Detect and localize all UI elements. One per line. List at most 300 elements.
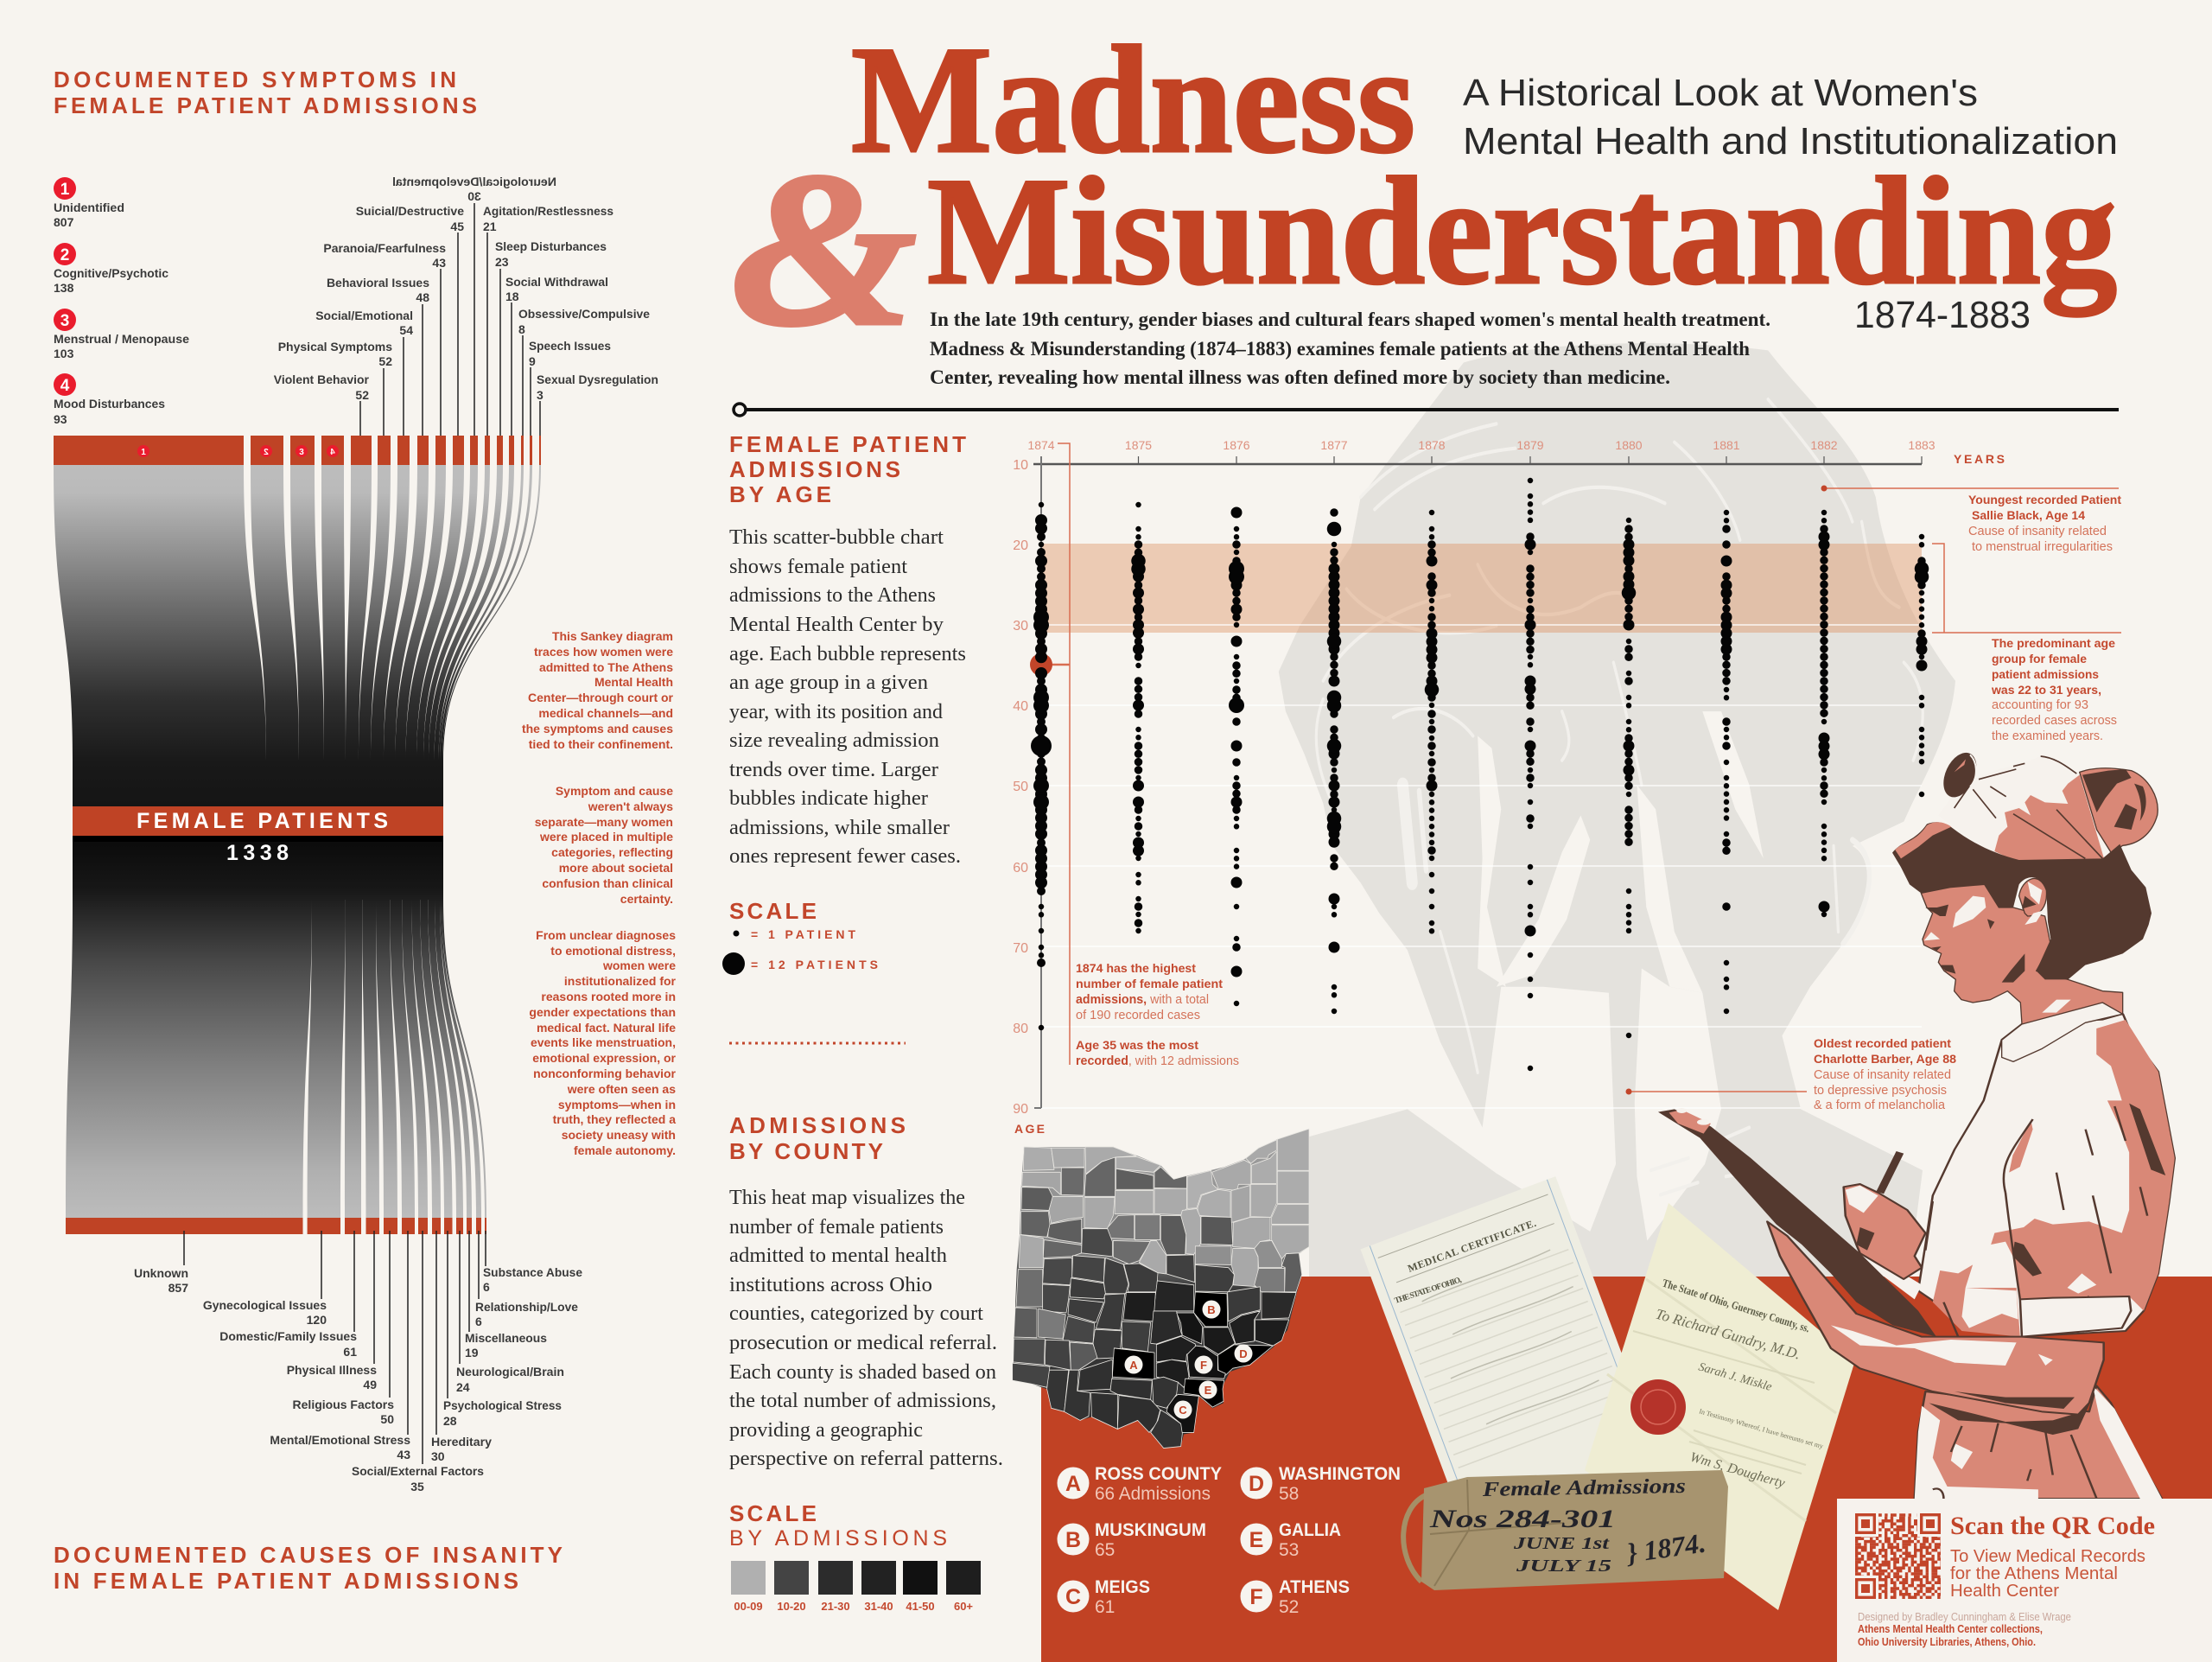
scale legend: patients — [722, 898, 878, 975]
symptom labels with leader lines: Obsessive/Compulsive — [518, 307, 650, 321]
nurse clipboard — [1658, 1109, 1936, 1337]
sankey explanatory notes: reasons rooted more in — [541, 990, 676, 1003]
cause labels with leader lines: 6 — [483, 1280, 490, 1294]
sankey explanatory notes: gender expectations than — [529, 1005, 676, 1019]
symptom labels with leader lines: Neurological/Developmental — [392, 175, 556, 188]
map county markers — [1125, 1300, 1253, 1419]
document: medical certificate — [1360, 1176, 1658, 1525]
county legend: C — [1065, 1585, 1081, 1609]
chart axes and year labels: 30 — [1013, 619, 1028, 634]
county legend: MEIGS — [1095, 1577, 1150, 1597]
subtitle — [1463, 72, 2118, 162]
county legend: 53 — [1279, 1540, 1299, 1560]
heading: documented causes: IN FEMALE PATIENT ADMISSIONS — [54, 1568, 518, 1594]
county legend: GALLIA — [1279, 1520, 1341, 1540]
scale legend: admissions: 31-40 — [864, 1600, 893, 1613]
heading: admissions by county — [729, 1112, 906, 1164]
cause labels with leader lines: 50 — [380, 1412, 394, 1426]
heading: documented causes — [54, 1542, 563, 1594]
callout: predominant age group: group for female — [1992, 652, 2087, 665]
map county markers: E — [1205, 1384, 1212, 1397]
text: chart description: shows female patient — [729, 556, 907, 578]
scatter-bubble chart: age by year — [1013, 438, 2121, 1136]
cause labels with leader lines: Physical Illness — [287, 1363, 377, 1377]
heading: admissions by age: FEMALE PATIENT — [729, 431, 966, 457]
sankey explanatory notes: were placed in multiple — [539, 830, 673, 844]
scale legend: patients: SCALE — [729, 898, 817, 924]
heading: admissions by age — [729, 431, 966, 507]
callout: youngest patient: to menstrual irregularities — [1972, 540, 2113, 554]
symptom labels with leader lines: 48 — [416, 290, 429, 304]
intro paragraph: Center, revealing how mental illness was often defined more by society than medicine. — [930, 366, 1670, 388]
chart axes and year labels: 1878 — [1418, 438, 1446, 452]
county legend: 52 — [1279, 1597, 1299, 1617]
symptom legend: 93 — [54, 412, 67, 426]
sankey explanatory notes: institutionalized for — [564, 974, 677, 988]
paper under writing hand — [1853, 1247, 1922, 1299]
county legend: B — [1065, 1528, 1081, 1552]
chart axes and year labels: 40 — [1013, 699, 1028, 714]
symptom labels with leader lines: 8 — [518, 322, 525, 336]
cause labels with leader lines: 49 — [363, 1378, 377, 1391]
chart axes and year labels: 80 — [1013, 1022, 1028, 1036]
symptom labels with leader lines: Speech Issues — [529, 339, 611, 353]
county legend: WASHINGTON — [1279, 1464, 1401, 1484]
cause labels with leader lines: Domestic/Family Issues — [219, 1329, 357, 1343]
heading: documented causes: DOCUMENTED CAUSES OF INSANITY — [54, 1542, 563, 1568]
text: map description: perspective on referral patterns. — [729, 1448, 1003, 1470]
sankey explanatory notes: admitted to The Athens — [539, 660, 673, 674]
cause labels with leader lines: Relationship/Love — [475, 1300, 578, 1314]
sankey explanatory notes: separate—many women — [535, 815, 673, 829]
callout: 1874 highest: admissions, with a total — [1076, 993, 1209, 1007]
sankey explanatory notes: confusion than clinical — [542, 876, 673, 890]
bubbles 1881 — [1724, 513, 1729, 1012]
symptom labels with leader lines: 52 — [355, 388, 369, 402]
sankey explanatory notes: Center—through court or — [528, 691, 674, 704]
QR panel: Health Center — [1950, 1582, 2059, 1601]
document: state of Ohio probate letter: To Richard Gundry, M.D. — [1654, 1306, 1802, 1363]
sankey explanatory notes: symptoms—when in — [558, 1098, 676, 1111]
title: Misunderstanding: Misunderstanding — [927, 145, 2117, 316]
chart axes and year labels: 70 — [1013, 941, 1028, 956]
QR panel: To View Medical Records — [1950, 1547, 2145, 1566]
bubbles 1877 — [1332, 513, 1337, 1012]
cause labels with leader lines: 35 — [410, 1480, 424, 1493]
callout: youngest patient: Cause of insanity related — [1968, 525, 2107, 538]
symptom legend: 3 — [60, 312, 69, 330]
clipboard fingers — [1669, 1108, 1711, 1134]
symptom labels with leader lines: 3 — [537, 388, 543, 402]
callout: 1874 highest: recorded, with 12 admissions — [1076, 1054, 1239, 1068]
sankey: bar badges: 1 — [141, 448, 146, 457]
map county markers: B — [1207, 1303, 1216, 1316]
chart axes and year labels: 20 — [1013, 538, 1028, 553]
sankey: cause flows — [66, 835, 486, 1218]
QR call to action: Scan the QR Code — [1950, 1512, 2155, 1540]
text: chart description: Mental Health Center by — [729, 614, 944, 636]
sankey: bar badges: 4 — [330, 448, 335, 457]
text: chart description: This scatter-bubble chart — [729, 526, 944, 549]
symptom labels with leader lines: Paranoia/Fearfulness — [323, 241, 446, 255]
sankey diagram — [54, 436, 541, 1234]
sankey explanatory notes: tied to their confinement. — [529, 737, 673, 751]
heading: admissions by county: BY COUNTY — [729, 1138, 883, 1164]
symptom labels with leader lines: Physical Symptoms — [278, 340, 392, 353]
text: chart description: admissions, while smaller — [729, 817, 950, 839]
symptom legend: 138 — [54, 281, 74, 295]
scale legend: admissions: 10-20 — [777, 1600, 806, 1613]
symptom legend: 4 — [60, 377, 70, 395]
QR code — [1854, 1512, 1942, 1600]
archival envelope: Nos 284-301 — [1429, 1505, 1616, 1533]
scale legend: admissions: BY ADMISSIONS — [729, 1526, 947, 1551]
text: chart description: admissions to the Athens — [729, 584, 936, 607]
age band 22 to 31 — [1041, 544, 1922, 633]
sankey: symptom flows — [54, 465, 541, 807]
cause labels with leader lines: Religious Factors — [293, 1398, 394, 1411]
callout lines — [1041, 443, 2121, 1092]
sankey explanatory notes: were often seen as — [567, 1082, 676, 1096]
symptom labels with leader lines: Social Withdrawal — [505, 275, 608, 289]
document: state of Ohio probate letter: In Testimony Whereof, I have hereunto set my — [1698, 1407, 1824, 1450]
document: medical certificate: THE STATE OF OHIO, — [1394, 1276, 1464, 1306]
symptom legend: Cognitive/Psychotic — [54, 266, 168, 280]
sankey explanatory notes: medical channels—and — [538, 706, 673, 720]
chart axes and year labels: 1875 — [1125, 438, 1152, 452]
symptom labels with leader lines: 9 — [529, 354, 536, 368]
sankey explanatory notes: more about societal — [559, 861, 673, 875]
callout: predominant age group: was 22 to 31 years, — [1991, 683, 2101, 697]
chart axes and year labels: 1874 — [1027, 438, 1055, 452]
symptom legend: Mood Disturbances — [54, 397, 165, 411]
sankey: top red bars — [54, 436, 541, 465]
callout: predominant age group: recorded cases across — [1992, 714, 2117, 728]
cause labels with leader lines: 43 — [397, 1448, 410, 1461]
symptom labels with leader lines: 23 — [495, 255, 509, 269]
sankey explanatory notes: female autonomy. — [574, 1143, 676, 1157]
timeline rule — [734, 404, 2119, 416]
map county markers: A — [1129, 1359, 1138, 1372]
sankey explanatory notes: the symptoms and causes — [522, 722, 673, 735]
chart axes and year labels: 50 — [1013, 780, 1028, 794]
credits: Athens Mental Health Center collections, — [1858, 1622, 2043, 1635]
symptom labels with leader lines — [274, 175, 658, 436]
background silhouette: woman's head — [1279, 343, 1955, 1279]
heading: admissions by age: ADMISSIONS — [729, 456, 900, 482]
county legend: 66 Admissions — [1095, 1484, 1211, 1504]
nurse forearm — [1767, 1221, 2104, 1415]
subtitle: Mental Health and Institutionalization — [1463, 120, 2118, 162]
cause labels with leader lines: 30 — [431, 1449, 445, 1463]
bubbles 1874 — [1039, 505, 1044, 1028]
symptom labels with leader lines: Sexual Dysregulation — [537, 373, 658, 386]
QR panel — [1837, 1499, 2212, 1662]
document: state of Ohio probate letter: Wm S. Dougherty — [1688, 1450, 1787, 1491]
cause labels with leader lines: Unknown — [134, 1266, 188, 1280]
bubbles 1879 — [1528, 481, 1533, 1069]
nurse skirt — [1915, 1385, 2162, 1499]
symptom legend: 807 — [54, 215, 74, 229]
cause labels with leader lines: Gynecological Issues — [203, 1298, 327, 1312]
sankey explanatory notes: to emotional distress, — [550, 944, 676, 958]
sankey explanatory notes: This Sankey diagram — [552, 629, 673, 643]
symptom labels with leader lines: 45 — [450, 220, 464, 233]
red ground panel — [1041, 1277, 2212, 1662]
symptom legend — [54, 177, 189, 426]
sankey explanatory notes: traces how women were — [534, 645, 673, 659]
scale legend: admissions: 21-30 — [821, 1600, 850, 1613]
text: chart description: age. Each bubble represents — [729, 643, 966, 665]
text: chart description: an age group in a given — [729, 672, 928, 694]
intro paragraph — [930, 309, 1770, 388]
intro paragraph: Madness & Misunderstanding (1874–1883) examines female patients at the Athens Mental Health — [930, 338, 1750, 360]
callout: oldest patient: Cause of insanity related — [1814, 1068, 1951, 1082]
bubbles 1883 — [1919, 537, 1924, 795]
sankey explanatory notes: Symptom and cause — [556, 784, 673, 798]
nurse sleeve band — [2020, 1296, 2131, 1337]
cause labels with leader lines: Neurological/Brain — [456, 1365, 564, 1379]
symptom legend: 2 — [60, 246, 69, 264]
callout: predominant age group: accounting for 93 — [1992, 698, 2088, 712]
cause labels with leader lines: Social/External Factors — [352, 1464, 484, 1478]
symptom labels with leader lines: Social/Emotional — [315, 309, 413, 322]
cause labels with leader lines: Mental/Emotional Stress — [270, 1433, 410, 1447]
document: state of Ohio probate letter: The State of Ohio, Guernsey County, ss. — [1661, 1277, 1811, 1334]
nurse cap — [1937, 748, 2104, 862]
sankey: bottom red bars — [66, 1218, 486, 1234]
map county markers: D — [1239, 1347, 1248, 1360]
Ohio county heat map — [1013, 1129, 1309, 1449]
county legend: 58 — [1279, 1484, 1299, 1504]
cause labels with leader lines: Hereditary — [431, 1435, 492, 1449]
title: Madness: Madness — [851, 14, 1415, 185]
archival envelope: JULY 15 — [1515, 1557, 1611, 1576]
callout: youngest patient — [1968, 493, 2121, 554]
text: chart description: year, with its position and — [729, 701, 943, 723]
callout: predominant age group: patient admissions — [1992, 667, 2099, 681]
symptom legend: 1 — [60, 181, 70, 199]
scale legend: admissions: 41-50 — [906, 1600, 935, 1613]
county legend: 61 — [1095, 1597, 1115, 1617]
county legend: ATHENS — [1279, 1577, 1350, 1597]
map county markers: C — [1179, 1404, 1187, 1417]
archival envelope — [1403, 1470, 1728, 1590]
heading: documented symptoms: DOCUMENTED SYMPTOMS IN — [54, 67, 456, 92]
callout: oldest patient: & a form of melancholia — [1814, 1098, 1946, 1112]
text: chart description: size revealing admission — [729, 729, 939, 752]
sankey explanatory notes: From unclear diagnoses — [536, 928, 676, 942]
credits: Ohio University Libraries, Athens, Ohio. — [1858, 1635, 2036, 1648]
callout: oldest patient: Charlotte Barber, Age 88 — [1814, 1052, 1956, 1066]
symptom labels with leader lines: Agitation/Restlessness — [483, 204, 613, 218]
bubbles 1882 — [1821, 513, 1827, 915]
callout: oldest patient — [1814, 1036, 1956, 1112]
sankey explanatory notes: women were — [602, 958, 676, 972]
cause labels with leader lines: Substance Abuse — [483, 1265, 582, 1279]
chart axes and year labels: AGE — [1014, 1122, 1045, 1136]
county legend: D — [1249, 1472, 1264, 1496]
cause labels with leader lines: 61 — [343, 1345, 357, 1359]
chart axes and year labels: 1876 — [1223, 438, 1250, 452]
sankey explanatory notes: society uneasy with — [562, 1128, 676, 1142]
county legend: F — [1249, 1585, 1263, 1609]
chart axes and year labels: 1881 — [1713, 438, 1740, 452]
symptom labels with leader lines: Behavioral Issues — [327, 276, 429, 290]
county legend: ROSS COUNTY — [1095, 1464, 1222, 1484]
nurse bun — [2080, 768, 2158, 853]
scale legend: admissions: SCALE — [729, 1500, 817, 1526]
sankey explanatory notes: events like menstruation, — [531, 1035, 676, 1049]
chart axes and year labels: 1883 — [1908, 438, 1936, 452]
title: ampersand: & — [731, 128, 917, 372]
callout: oldest patient: to depressive psychosis — [1814, 1084, 1947, 1098]
callout: oldest patient: Oldest recorded patient — [1814, 1036, 1951, 1050]
callout: predominant age group — [1991, 636, 2117, 743]
nurse writing hand and pen — [1844, 1152, 1925, 1279]
chart axes and year labels: 1882 — [1810, 438, 1838, 452]
text: map description: counties, categorized by court — [729, 1302, 983, 1325]
symptom labels with leader lines: Suicial/Destructive — [356, 204, 464, 218]
scale legend: admissions — [729, 1500, 981, 1613]
credits — [1858, 1610, 2071, 1648]
intro paragraph: In the late 19th century, gender biases and cultural fears shaped women's mental health treatment. — [930, 309, 1770, 330]
bubbles 1878 — [1429, 513, 1434, 932]
sankey: bar badges: 2 — [264, 448, 269, 457]
text: map description: This heat map visualizes the — [729, 1187, 965, 1209]
cause labels with leader lines: Miscellaneous — [465, 1331, 547, 1345]
symptom labels with leader lines: Violent Behavior — [274, 373, 370, 386]
nurse hair — [1892, 822, 2152, 979]
text: map description: prosecution or medical referral. — [729, 1332, 997, 1354]
chart axes and year labels: 90 — [1013, 1102, 1028, 1117]
scale legend: patients: = 12 PATIENTS — [751, 958, 878, 971]
sankey: center label — [73, 806, 443, 865]
sankey explanatory notes: truth, they reflected a — [553, 1112, 676, 1126]
sankey explanatory notes: weren't always — [588, 799, 673, 813]
county legend: E — [1249, 1528, 1263, 1552]
scale legend: admissions: 60+ — [954, 1600, 973, 1613]
cause labels with leader lines: 19 — [465, 1346, 479, 1360]
sankey explanatory notes — [522, 629, 677, 1157]
text: chart description: ones represent fewer cases. — [729, 845, 961, 868]
symptom labels with leader lines: 43 — [432, 256, 446, 270]
heading: admissions by county: ADMISSIONS — [729, 1112, 906, 1138]
text: map description: institutions across Ohio — [729, 1274, 932, 1296]
symptom legend: 103 — [54, 347, 74, 360]
callout: 1874 highest: Age 35 was the most — [1076, 1038, 1198, 1052]
subtitle: A Historical Look at Women's — [1463, 72, 1978, 114]
chart axes and year labels: 10 — [1013, 458, 1028, 473]
chart axes and year labels: 1880 — [1615, 438, 1643, 452]
symptom labels with leader lines: 21 — [483, 220, 497, 233]
text: map description: Each county is shaded based on — [729, 1361, 996, 1384]
date range: 1874-1883 — [1854, 294, 2031, 336]
sankey: bar badges — [137, 445, 339, 457]
archival envelope: } 1874. — [1624, 1527, 1707, 1569]
QR panel: for the Athens Mental — [1950, 1564, 2118, 1583]
text: chart description: bubbles indicate higher — [729, 787, 928, 810]
sankey explanatory notes: nonconforming behavior — [533, 1067, 677, 1080]
sankey explanatory notes: Mental Health — [594, 675, 673, 689]
cause labels with leader lines: 120 — [307, 1313, 327, 1327]
nurse dress — [1918, 1014, 2175, 1337]
chart axes and year labels: 1879 — [1516, 438, 1544, 452]
text: map description — [729, 1187, 1003, 1470]
chart axes and year labels — [1013, 438, 2005, 1136]
callout: 1874 highest — [1076, 961, 1239, 1068]
text: chart description — [729, 526, 966, 868]
sankey: center label: 1338 — [226, 841, 289, 865]
heading: admissions by age: BY AGE — [729, 481, 831, 507]
archival envelope: JUNE 1st — [1513, 1534, 1611, 1553]
chart axes and year labels: 60 — [1013, 861, 1028, 876]
county legend: A — [1065, 1472, 1081, 1496]
document: state of Ohio probate letter — [1585, 1203, 1855, 1610]
document: state of Ohio probate letter: Sarah J. Miskle — [1697, 1360, 1773, 1394]
sankey explanatory notes: medical fact. Natural life — [537, 1021, 676, 1035]
cause labels with leader lines — [134, 1231, 582, 1493]
text: chart description: trends over time. Larger — [729, 759, 938, 781]
county legend: 65 — [1095, 1540, 1115, 1560]
sankey explanatory notes: emotional expression, or — [532, 1051, 677, 1065]
callout: 1874 highest: 1874 has the highest — [1076, 961, 1196, 975]
callout: 1874 highest: number of female patient — [1076, 977, 1223, 990]
county legend — [1058, 1464, 1401, 1617]
nurse collar — [2002, 1003, 2123, 1061]
text: map description: providing a geographic — [729, 1419, 923, 1442]
cause labels with leader lines: 24 — [456, 1380, 470, 1394]
nurse body — [1658, 1014, 2175, 1499]
chart axes and year labels: YEARS — [1954, 452, 2005, 466]
symptom legend: Menstrual / Menopause — [54, 332, 189, 346]
symptom labels with leader lines: 30 — [467, 189, 481, 203]
sankey explanatory notes: certainty. — [620, 892, 673, 906]
text: map description: the total number of admissions, — [729, 1390, 996, 1412]
cause labels with leader lines: 6 — [475, 1315, 482, 1328]
callout: predominant age group: The predominant age — [1992, 636, 2115, 650]
cause labels with leader lines: Psychological Stress — [443, 1398, 562, 1412]
nurse face and neck — [1921, 884, 2123, 1024]
county legend: MUSKINGUM — [1095, 1520, 1206, 1540]
sankey: center label: FEMALE PATIENTS — [137, 809, 388, 833]
nurse head — [1892, 748, 2158, 1061]
text: map description: admitted to mental health — [729, 1245, 947, 1267]
sankey explanatory notes: categories, reflecting — [551, 845, 673, 859]
callout: 1874 highest: of 190 recorded cases — [1076, 1009, 1200, 1022]
scale legend: patients: = 1 PATIENT — [751, 927, 855, 941]
credits: Designed by Bradley Cunningham & Elise Wrage — [1858, 1610, 2071, 1623]
symptom labels with leader lines: 52 — [378, 354, 392, 368]
symptom legend: Unidentified — [54, 201, 124, 214]
bubbles 1876 — [1234, 513, 1239, 1004]
scale legend: admissions: 00-09 — [734, 1600, 763, 1613]
cause labels with leader lines: 857 — [168, 1281, 188, 1295]
heading: documented symptoms: FEMALE PATIENT ADMISSIONS — [54, 92, 477, 118]
sankey: bar badges: 3 — [299, 448, 304, 457]
bubbles 1875 — [1135, 505, 1141, 932]
bubbles 1880 — [1626, 520, 1631, 1036]
archival envelope: Female Admissions — [1481, 1475, 1686, 1501]
symptom labels with leader lines: Sleep Disturbances — [495, 239, 607, 253]
map county markers: F — [1200, 1359, 1207, 1372]
text: map description: number of female patients — [729, 1216, 944, 1239]
heading: documented symptoms — [54, 67, 477, 118]
callout: youngest patient: Youngest recorded Patient — [1968, 493, 2121, 506]
nurse illustration — [1658, 748, 2175, 1499]
callout: predominant age group: the examined years. — [1992, 729, 2103, 743]
symptom labels with leader lines: 54 — [399, 323, 413, 337]
